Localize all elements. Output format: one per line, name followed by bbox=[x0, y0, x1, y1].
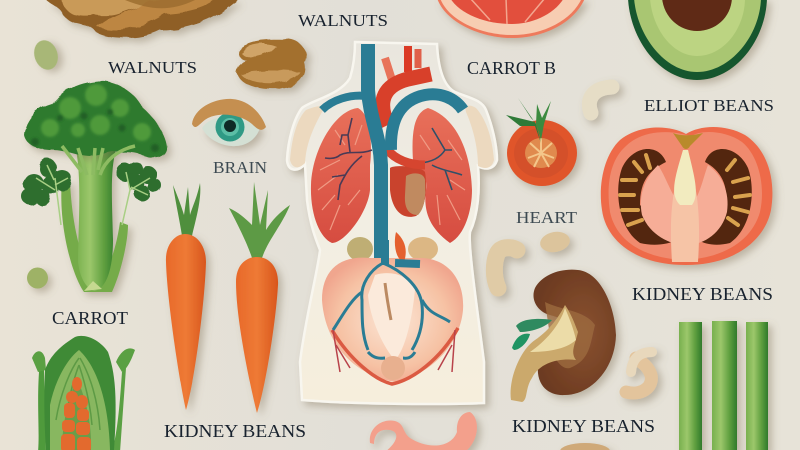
blue vessels bbox=[322, 44, 463, 270]
celery stalks bbox=[679, 321, 768, 450]
left lung bbox=[311, 108, 372, 243]
abdominal organs bbox=[322, 232, 463, 384]
label: walnuts top: WALNUTS bbox=[298, 11, 388, 30]
side parsley right bbox=[116, 161, 162, 201]
outer stalks bbox=[61, 150, 128, 292]
small green pea bbox=[27, 268, 48, 288]
label: kidney beans right: KIDNEY BEANS bbox=[632, 284, 773, 304]
florets bbox=[24, 81, 167, 158]
small tomato bbox=[506, 98, 577, 186]
label: elliot beans: ELLIOT BEANS bbox=[644, 96, 774, 115]
cashew lower right bbox=[626, 352, 652, 393]
large tomato cross-section bbox=[601, 127, 772, 265]
avocado bbox=[628, 0, 767, 80]
label: carrot left: CARROT bbox=[52, 308, 128, 328]
carrot right bbox=[229, 182, 290, 413]
kidney-shaped beans bbox=[494, 230, 572, 288]
green almond bbox=[30, 37, 62, 73]
label: kidney beans bottom left: KIDNEY BEANS bbox=[164, 421, 306, 441]
right lung bbox=[413, 108, 472, 243]
anatomy panel bbox=[287, 42, 497, 404]
body silhouette bbox=[287, 42, 497, 404]
side parsley left bbox=[22, 159, 72, 205]
arm left bbox=[290, 106, 324, 167]
label: heart: HEART bbox=[516, 208, 578, 227]
carrot in husk bbox=[32, 336, 135, 450]
cashew top right bbox=[589, 87, 612, 113]
eye with walnut brow bbox=[192, 99, 266, 146]
large walnut bbox=[40, 0, 244, 38]
aorta and heart bbox=[383, 46, 431, 217]
kidney: brown bean organ bbox=[511, 270, 616, 402]
carrot left bbox=[166, 183, 206, 410]
label: carrot b: CARROT B bbox=[467, 58, 556, 78]
stomach bbox=[370, 412, 477, 450]
grapefruit slice bbox=[437, 0, 585, 38]
broccoli and celery stem bbox=[22, 81, 167, 292]
label: kidney beans centre: KIDNEY BEANS bbox=[512, 416, 655, 436]
label: brain: BRAIN bbox=[213, 158, 267, 177]
arm right bbox=[466, 106, 494, 168]
branches bbox=[62, 146, 135, 175]
nut at bottom edge bbox=[560, 443, 610, 450]
small walnut bbox=[236, 39, 306, 89]
label: walnuts left: WALNUTS bbox=[108, 58, 197, 77]
